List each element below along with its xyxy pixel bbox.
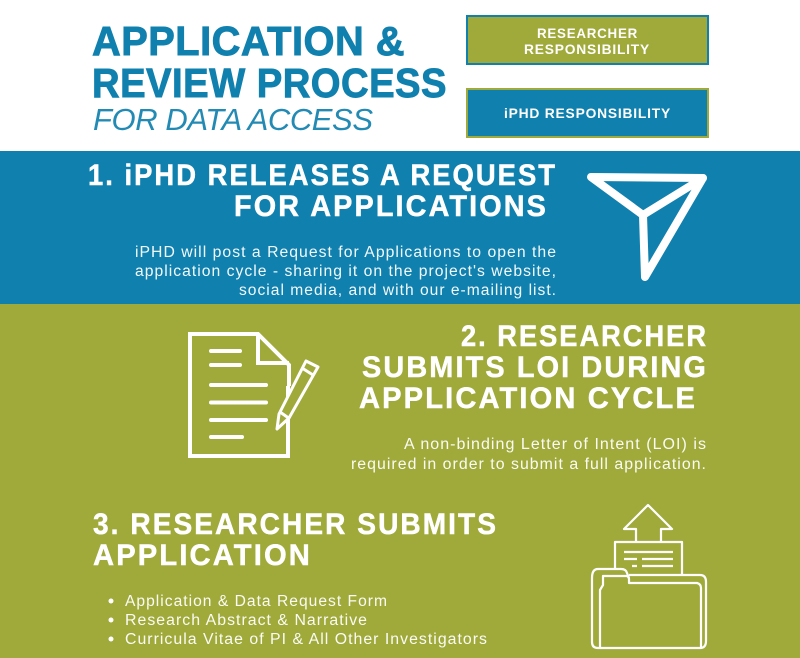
step 3 bullet list — [108, 593, 488, 648]
step 3 heading: 3. RESEARCHER SUBMITS — [93, 508, 498, 541]
icon: folder with upload arrow — [592, 505, 706, 648]
step 1 heading: FOR APPLICATIONS — [234, 190, 548, 223]
step 2 heading: APPLICATION CYCLE — [359, 382, 697, 415]
step 2 heading — [359, 320, 708, 415]
title: FOR DATA ACCESS — [93, 102, 373, 137]
step 1 heading — [88, 159, 557, 223]
step 3 bullet list: Application & Data Request Form — [125, 593, 388, 610]
step 1 heading: 1. iPHD RELEASES A REQUEST — [88, 159, 557, 192]
step 2 description — [351, 436, 707, 473]
step 1 description: application cycle - sharing it on the project's website, — [135, 263, 557, 280]
step 3 heading: APPLICATION — [93, 539, 312, 572]
step 1 description: iPHD will post a Request for Applications to open the — [135, 244, 557, 261]
legend: researcher responsibility: RESPONSIBILITY — [524, 41, 650, 57]
title — [92, 18, 447, 137]
legend: researcher responsibility — [467, 16, 708, 64]
step 2 heading: 2. RESEARCHER — [461, 320, 708, 353]
step 1 description — [135, 244, 557, 299]
icon: document and pencil — [190, 334, 318, 456]
title: REVIEW PROCESS — [92, 60, 447, 106]
legend: iPHD responsibility — [467, 89, 708, 137]
legend: researcher responsibility: RESEARCHER — [537, 25, 638, 41]
icon: paper plane — [591, 177, 703, 277]
title: APPLICATION & — [92, 18, 405, 64]
panel: researcher steps background — [0, 304, 800, 658]
step 2 description: required in order to submit a full application. — [351, 456, 707, 473]
legend: iPHD responsibility: iPHD RESPONSIBILITY — [504, 105, 671, 121]
step 3 bullet list: Curricula Vitae of PI & All Other Investigators — [125, 631, 488, 648]
step 1 description: social media, and with our e-mailing list. — [239, 282, 557, 299]
step 2 description: A non-binding Letter of Intent (LOI) is — [404, 436, 707, 453]
step 3 bullet list: Research Abstract & Narrative — [125, 612, 368, 629]
step 3 heading — [93, 508, 498, 572]
panel: step 1 band — [0, 151, 800, 304]
step 2 heading: SUBMITS LOI DURING — [362, 351, 708, 384]
